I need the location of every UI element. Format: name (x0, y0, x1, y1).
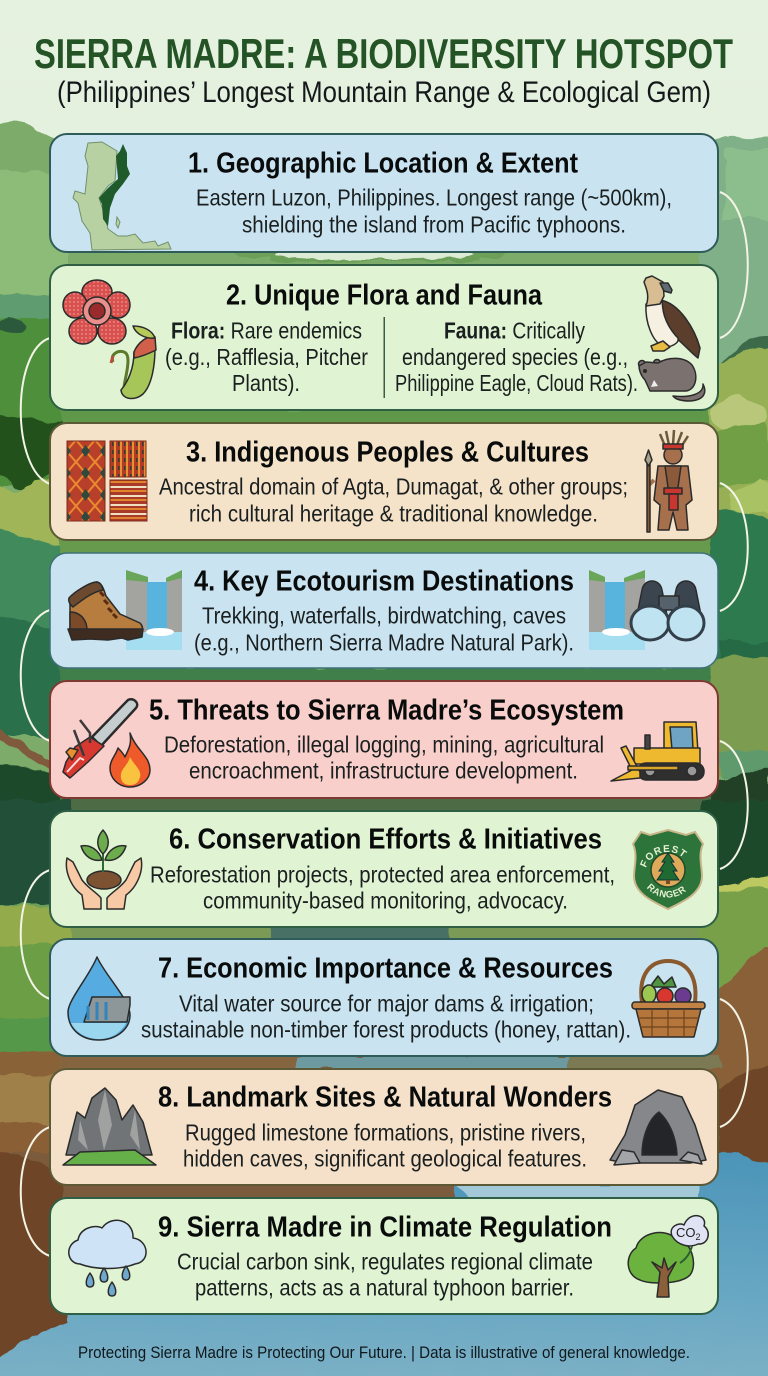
icon: forest ranger badge: RANGER (646, 883, 686, 898)
body 4 (194, 602, 574, 656)
body 4: Trekking, waterfalls, birdwatching, caves (202, 602, 566, 628)
body 3 (159, 474, 628, 526)
icon: bulldozer (611, 722, 704, 781)
panel 6: conservation (49, 810, 719, 928)
panel 1: geographic location (50, 134, 718, 252)
body 3: rich cultural heritage & traditional knowledge. (189, 500, 598, 526)
heading 7: 7. Economic Importance & Resources (158, 952, 613, 984)
body 9: Crucial carbon sink, regulates regional climate (177, 1248, 593, 1274)
body 1: shielding the island from Pacific typhoons. (242, 212, 626, 238)
icon: waterfall right (589, 570, 645, 650)
icon: water drop with dam (68, 957, 130, 1040)
icon: woven textiles (67, 441, 147, 521)
panel 8: landmark sites (50, 1069, 718, 1185)
panel 4: ecotourism (50, 553, 718, 668)
connector lines (21, 192, 748, 1256)
heading 6: 6. Conservation Efforts & Initiatives (169, 824, 602, 856)
panel 9: climate regulation (50, 1198, 718, 1314)
heading 5: 5. Threats to Sierra Madre’s Ecosystem (149, 694, 624, 726)
divider (384, 317, 385, 398)
body 1 (196, 184, 672, 238)
body 9: patterns, acts as a natural typhoon barrier. (195, 1274, 574, 1300)
icon: binoculars (631, 581, 704, 640)
body 5 (164, 732, 604, 784)
heading 1: 1. Geographic Location & Extent (188, 148, 578, 180)
body 6: community-based monitoring, advocacy. (203, 888, 568, 914)
icon: Philippine eagle (644, 276, 700, 358)
icon: rafflesia (63, 280, 130, 344)
icon: hands with sprout (66, 830, 142, 909)
icon: forest ranger badge: FOREST (640, 845, 688, 868)
body 6 (150, 862, 615, 914)
footer note: Protecting Sierra Madre is Protecting Our Future. | Data is illustrative of general knowledge. (78, 1344, 690, 1362)
icon: indigenous person (645, 430, 692, 532)
flora text (165, 318, 368, 396)
icon: waterfall left (126, 570, 182, 650)
body 3: Ancestral domain of Agta, Dumagat, & other groups; (159, 474, 628, 500)
icon: tree absorbing CO2: CO (676, 1225, 696, 1240)
icon: hiking boot (68, 582, 143, 640)
heading 9: 9. Sierra Madre in Climate Regulation (158, 1212, 612, 1244)
icon: basket of produce (632, 961, 705, 1037)
lower right (700, 800, 768, 888)
panel 7: economic importance (50, 939, 718, 1056)
flora text: (e.g., Rafflesia, Pitcher (165, 344, 368, 370)
fauna text: Philippine Eagle, Cloud Rats). (395, 370, 638, 396)
body 8: hidden caves, significant geological features. (183, 1146, 587, 1172)
gaps between panels upper (60, 408, 710, 426)
right column forest (700, 138, 768, 370)
fauna text: endangered species (e.g., (402, 344, 628, 370)
body 8 (183, 1120, 587, 1172)
body 1: Eastern Luzon, Philippines. Longest range (~500km), (196, 184, 672, 210)
body 8: Rugged limestone formations, pristine rivers, (185, 1120, 586, 1146)
panel 3: indigenous peoples (50, 423, 718, 540)
panel 5: threats (50, 681, 718, 798)
fauna text (395, 318, 638, 396)
heading 8: 8. Landmark Sites & Natural Wonders (158, 1082, 612, 1114)
icon: forest ranger badge (632, 829, 704, 910)
icon: cave (610, 1090, 706, 1165)
river (0, 1150, 768, 1376)
flora text: Plants). (232, 370, 300, 396)
flora text: Flora: Rare endemics (171, 318, 362, 344)
forest mid base (0, 124, 768, 830)
heading 3: 3. Indigenous Peoples & Cultures (186, 436, 589, 468)
body 4: (e.g., Northern Sierra Madre Natural Park). (194, 630, 574, 656)
icon: chainsaw (63, 699, 137, 778)
body 7: Vital water source for major dams & irrigation; (179, 990, 594, 1016)
icon: cloud rat (638, 358, 705, 401)
body 7 (141, 990, 631, 1042)
body 9 (177, 1248, 593, 1300)
icon: flame (110, 733, 150, 787)
body 5: Deforestation, illegal logging, mining, agricultural (164, 732, 604, 758)
heading 4: 4. Key Ecotourism Destinations (194, 566, 574, 598)
icon: tree absorbing CO2: 2 (696, 1232, 701, 1242)
fauna text: Fauna: Critically (444, 318, 585, 344)
icon: limestone peaks (63, 1088, 156, 1165)
icon: pitcher plant (111, 326, 156, 399)
panel 2: flora and fauna (50, 265, 718, 410)
body 6: Reforestation projects, protected area enforcement, (150, 862, 615, 888)
icon: Luzon map (73, 142, 171, 250)
icon: tree absorbing CO2 (628, 1216, 708, 1297)
heading 2: 2. Unique Flora and Fauna (226, 280, 543, 312)
body 7: sustainable non-timber forest products (honey, rattan). (141, 1016, 631, 1042)
lower left (0, 800, 70, 905)
icon: rain cloud (69, 1220, 146, 1296)
body 5: encroachment, infrastructure development. (189, 758, 578, 784)
